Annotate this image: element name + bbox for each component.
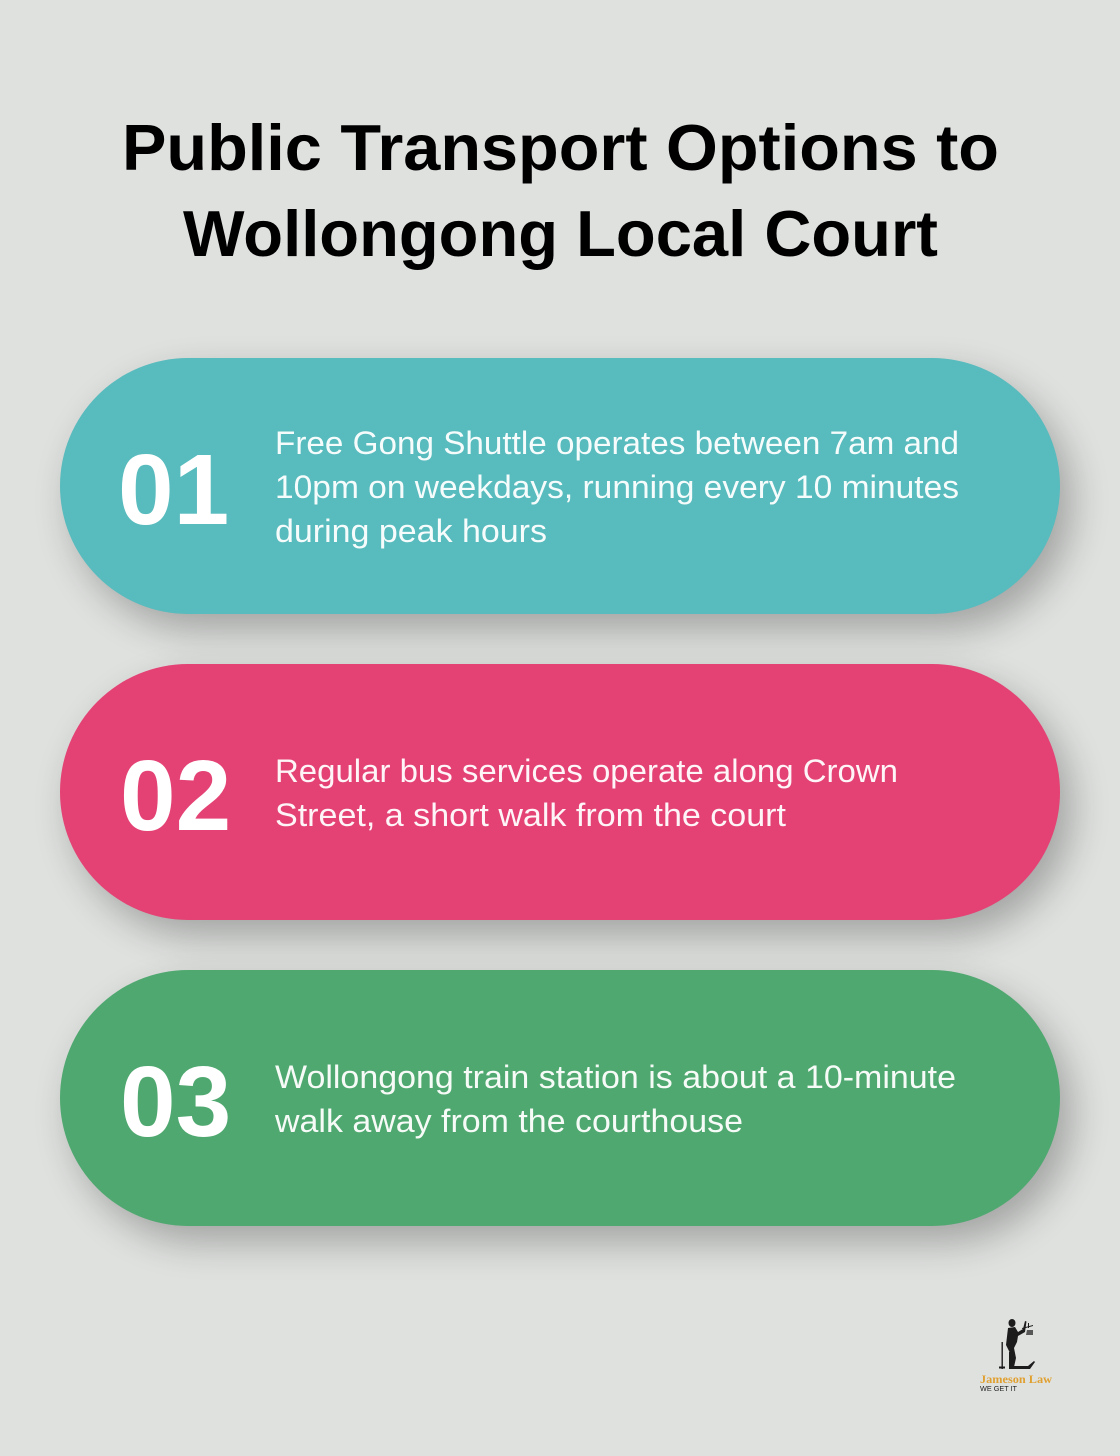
number 02: 02 [120, 740, 231, 852]
text: step 03 description: Wollongong train station is about a 10-minute [275, 1059, 956, 1095]
text: step 02 description [275, 753, 898, 833]
text: step 03 description [274, 1059, 956, 1139]
text: step 01 description: 10pm on weekdays, running every 10 minutes [275, 469, 959, 505]
title [122, 111, 999, 270]
text: step 02 description: Street, a short walk from the court [275, 797, 786, 833]
text: step 01 description: Free Gong Shuttle operates between 7am and [275, 425, 959, 461]
number 03: 03 [120, 1046, 231, 1158]
logo: Jameson Law [980, 1319, 1052, 1393]
title: Public Transport Options to [122, 111, 999, 184]
text: WE GET IT: WE GET IT [980, 1386, 1018, 1393]
panel: step 01 free Gong Shuttle [60, 358, 1060, 614]
text: step 03 description: walk away from the courthouse [274, 1103, 743, 1139]
text: step 02 description: Regular bus services operate along Crown [275, 753, 898, 789]
text: Jameson Law: Jameson Law [980, 1372, 1052, 1386]
number 01: 01 [118, 434, 229, 546]
panel: step 03 train station [60, 970, 1060, 1226]
icon: lady justice [999, 1319, 1035, 1369]
panel: step 02 regular bus services [60, 664, 1060, 920]
title: Wollongong Local Court [183, 197, 938, 270]
text: step 01 description [275, 425, 959, 549]
text: step 01 description: during peak hours [275, 513, 547, 549]
